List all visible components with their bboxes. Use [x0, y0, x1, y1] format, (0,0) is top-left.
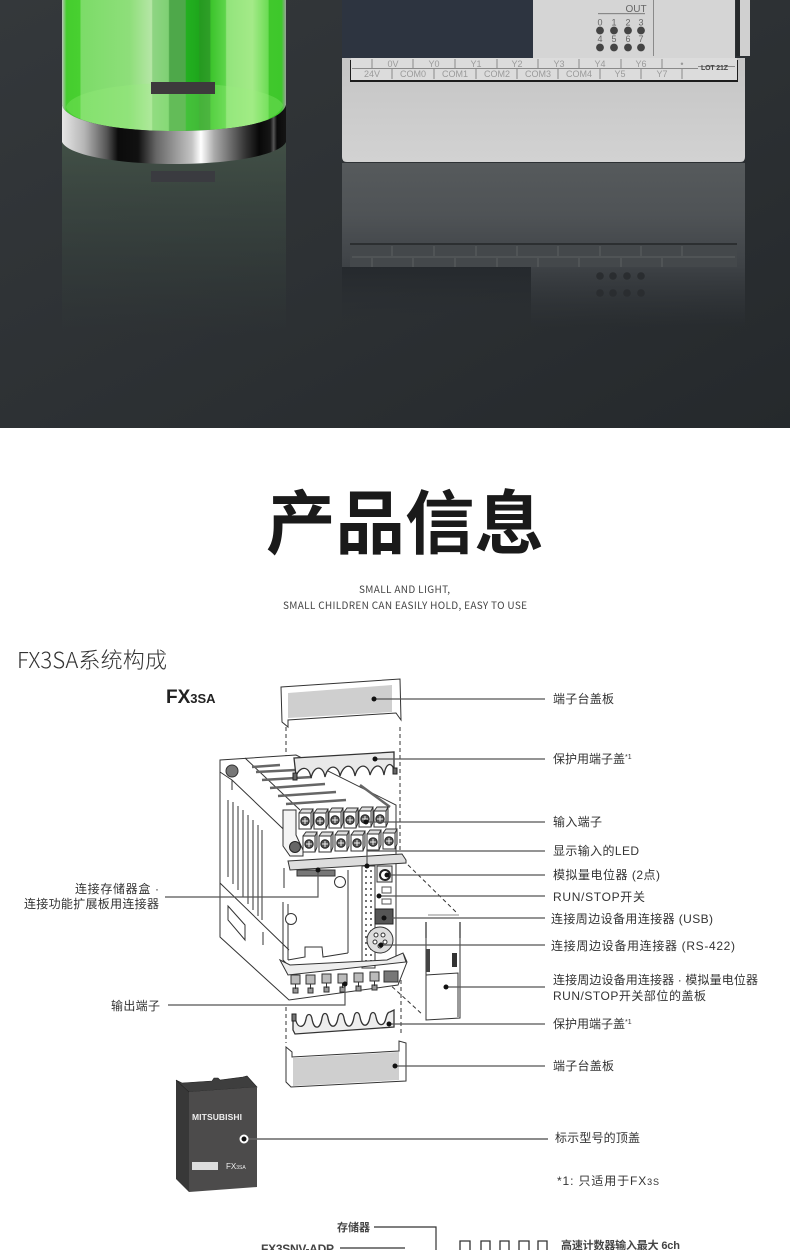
dashed assembly guides [286, 727, 457, 1043]
USB port [375, 909, 393, 924]
callout labels: 输入端子 [553, 814, 602, 829]
diagram: exploded FX3SA PLC [165, 679, 545, 1087]
terminal strip: COM4 [566, 69, 592, 79]
module reflection [342, 163, 745, 327]
subheading text [283, 581, 527, 612]
OUT indicators: 0 [597, 18, 603, 28]
analog potentiometers [377, 866, 392, 882]
port side cover [426, 915, 460, 1020]
leader lines and dots [165, 696, 545, 1068]
input terminals [283, 807, 397, 856]
RUN/STOP switch [382, 887, 391, 904]
battery minus sign [151, 82, 215, 94]
callout labels: 保护用端子盖 [553, 1017, 625, 1031]
terminal strip: COM3 [525, 69, 551, 79]
terminal strip: COM2 [484, 69, 510, 79]
top cover module (MITSUBISHI): MITSUBISHI [192, 1112, 242, 1122]
connector slot [297, 870, 335, 876]
terminal strip: 24V [364, 69, 380, 79]
top cover module (MITSUBISHI): FX3SA [226, 1162, 246, 1171]
upper protective terminal cover [293, 752, 397, 780]
top terminal block cover [281, 679, 401, 727]
callout labels: 端子台盖板 [553, 1058, 614, 1073]
subheading text: SMALL CHILDREN CAN EASILY HOLD, EASY TO USE [283, 597, 527, 612]
terminal strip: COM1 [442, 69, 468, 79]
module lower body [342, 58, 745, 162]
callout labels: 连接存储器盒 · [75, 881, 159, 896]
battery reflection [62, 140, 286, 335]
bottom partial diagram [261, 1220, 680, 1250]
terminal strip: Y6 [635, 59, 647, 69]
terminal strip: Y3 [553, 59, 565, 69]
main unit left face [220, 755, 407, 1000]
section title: FX3SA系统构成: FX3SA系统构成 [17, 643, 167, 675]
callout labels: 连接周边设备用连接器 (USB) [551, 911, 713, 926]
panel: dark hero background [0, 0, 790, 428]
terminals row [460, 1241, 547, 1250]
terminal strip: 0V [387, 59, 399, 69]
callout labels: 端子台盖板 [553, 691, 614, 706]
callout labels: 模拟量电位器 (2点) [553, 867, 660, 882]
OUT indicators: 3 [638, 18, 644, 28]
callout labels: *1: 只适用于FX3S [557, 1174, 659, 1188]
LED and connector column [362, 866, 375, 968]
bottom terminal block cover [286, 1041, 406, 1087]
dark cover panel [342, 0, 533, 58]
terminal strip: • [680, 59, 684, 69]
top vents [252, 765, 390, 807]
top cover module (MITSUBISHI) [176, 1076, 548, 1192]
callout labels [24, 691, 758, 1188]
terminal strip: LOT 21Z [701, 65, 729, 72]
terminal strip: COM0 [400, 69, 426, 79]
diagram label: FX3SA: FX3SA [166, 687, 216, 708]
OUT indicators: 6 [625, 34, 631, 44]
terminal strip: Y2 [511, 59, 523, 69]
PLC module [342, 0, 750, 162]
terminal strip: Y4 [594, 59, 606, 69]
OUT indicators: 4 [597, 34, 603, 44]
OUT indicators: 7 [638, 34, 644, 44]
terminal strip [350, 58, 738, 82]
OUT indicators: 1 [611, 18, 617, 28]
callout labels: *1 [625, 1019, 632, 1026]
OUT indicators: 5 [611, 34, 617, 44]
heading: 产品信息: 产品信息 [266, 468, 544, 569]
OUT indicators: 2 [625, 18, 631, 28]
terminal strip: Y5 [614, 69, 626, 79]
callout labels: 显示输入的LED [553, 843, 639, 858]
icon: green battery [62, 0, 286, 164]
callout labels: RUN/STOP开关 [553, 890, 645, 904]
subheading text: SMALL AND LIGHT, [359, 581, 450, 596]
lower rail [280, 953, 406, 975]
callout labels: 保护用端子盖 [553, 752, 625, 766]
battery metal base ring [62, 105, 286, 164]
terminal strip: Y1 [470, 59, 482, 69]
OUT indicators [596, 4, 647, 51]
callout labels: 标示型号的顶盖 [555, 1130, 640, 1145]
callout labels: *1 [625, 754, 632, 761]
upper connector rail [288, 854, 406, 870]
callout labels: 连接周边设备用连接器 · 模拟量电位器 [553, 972, 758, 987]
output terminals [291, 971, 398, 993]
terminal strip: Y7 [656, 69, 668, 79]
callout labels: 连接功能扩展板用连接器 [24, 896, 159, 911]
RS-422 port [367, 927, 393, 953]
lower protective terminal cover [292, 1010, 394, 1034]
callout labels: 连接周边设备用连接器 (RS-422) [551, 938, 735, 953]
callout labels: RUN/STOP开关部位的盖板 [553, 988, 706, 1003]
memory label: 存储器 [337, 1220, 370, 1234]
model cover leader [244, 1138, 548, 1140]
callout labels: 输出端子 [111, 998, 160, 1013]
OUT indicators: OUT [625, 4, 647, 15]
terminal strip: Y0 [428, 59, 440, 69]
